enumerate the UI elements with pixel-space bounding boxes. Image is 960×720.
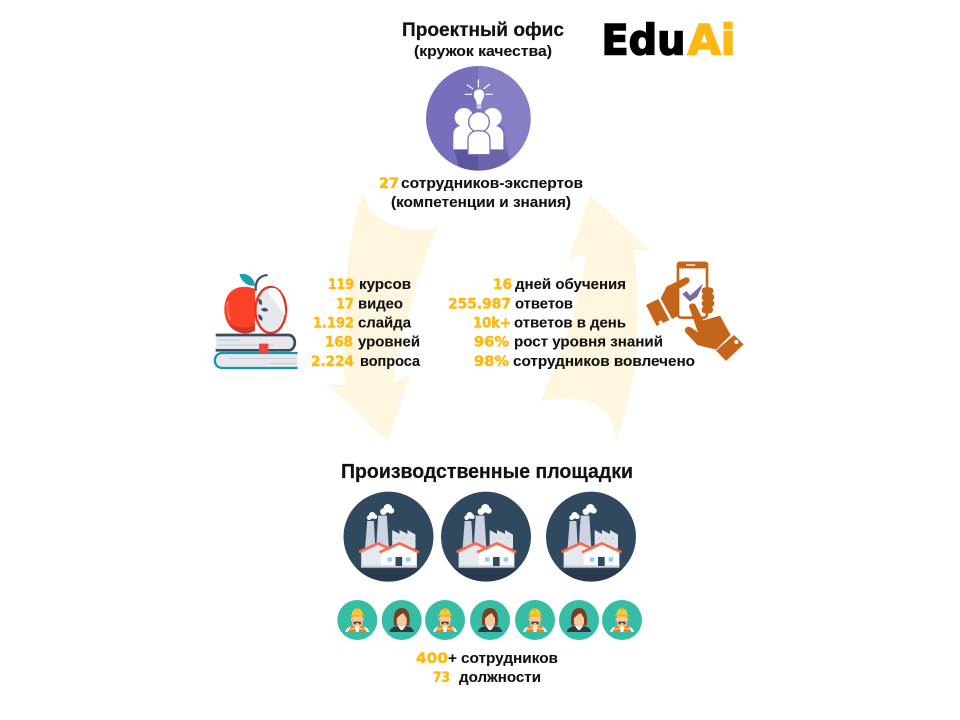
text: employees and positions	[416, 650, 558, 686]
list: course statistics	[311, 276, 421, 370]
list: course statistics: 1.192	[313, 316, 354, 332]
list: learning statistics: рост уровня знаний	[514, 334, 663, 350]
text: competencies and knowledge: (компетенции и знания)	[391, 194, 571, 211]
icon: hands holding phone with check mark	[646, 262, 744, 361]
icon: factory 3	[542, 492, 639, 585]
heading: production sites: Производственные площадки	[341, 461, 633, 483]
arrow: left downward background arrow	[328, 190, 438, 442]
subtitle: quality circle: (кружок качества)	[414, 43, 552, 60]
list: learning statistics: 10k+	[473, 316, 511, 332]
text: experts count: 27	[379, 176, 399, 192]
list: learning statistics: ответов в день	[514, 314, 626, 332]
list: course statistics: 168	[325, 334, 353, 350]
list: course statistics: слайда	[358, 314, 412, 332]
list: learning statistics: 96%	[474, 334, 509, 350]
logo: EduAi: Edu	[602, 15, 686, 64]
text: employees and positions: 400	[416, 651, 448, 667]
icon: apple on books	[215, 274, 298, 368]
text: employees and positions: должности	[459, 669, 541, 686]
list: learning statistics	[448, 276, 695, 370]
icon: factory 1	[340, 492, 436, 585]
list: course statistics: 119	[328, 277, 354, 293]
logo accent: Ai: Ai	[688, 15, 736, 64]
list: course statistics: уровней	[358, 334, 420, 350]
list: learning statistics: дней обучения	[515, 276, 626, 293]
text: employees and positions: сотрудников	[461, 650, 558, 667]
list: course statistics: вопроса	[360, 353, 421, 370]
icon row: workers	[337, 600, 642, 640]
list: learning statistics: 98%	[474, 354, 509, 370]
text: experts count: сотрудников-экспертов	[401, 175, 583, 192]
list: learning statistics: 255.987	[448, 296, 511, 312]
list: course statistics: 2.224	[311, 354, 354, 370]
list: course statistics: курсов	[359, 276, 411, 293]
icon: expert team with light bulb	[426, 66, 531, 171]
list: course statistics: 17	[336, 296, 354, 312]
title: project office: Проектный офис	[402, 20, 564, 41]
text: employees and positions: +	[448, 650, 457, 667]
list: learning statistics: сотрудников вовлечено	[513, 353, 695, 370]
text: employees and positions: 73	[433, 670, 450, 686]
logo: EduAi	[602, 15, 736, 64]
list: course statistics: видео	[358, 296, 403, 312]
title: project office	[402, 20, 564, 60]
list: learning statistics: ответов	[515, 296, 573, 312]
list: learning statistics: 16	[493, 277, 512, 293]
icon: factory 2	[437, 492, 534, 585]
arrow: right upward background arrow	[541, 195, 651, 440]
text: experts count	[379, 175, 583, 211]
